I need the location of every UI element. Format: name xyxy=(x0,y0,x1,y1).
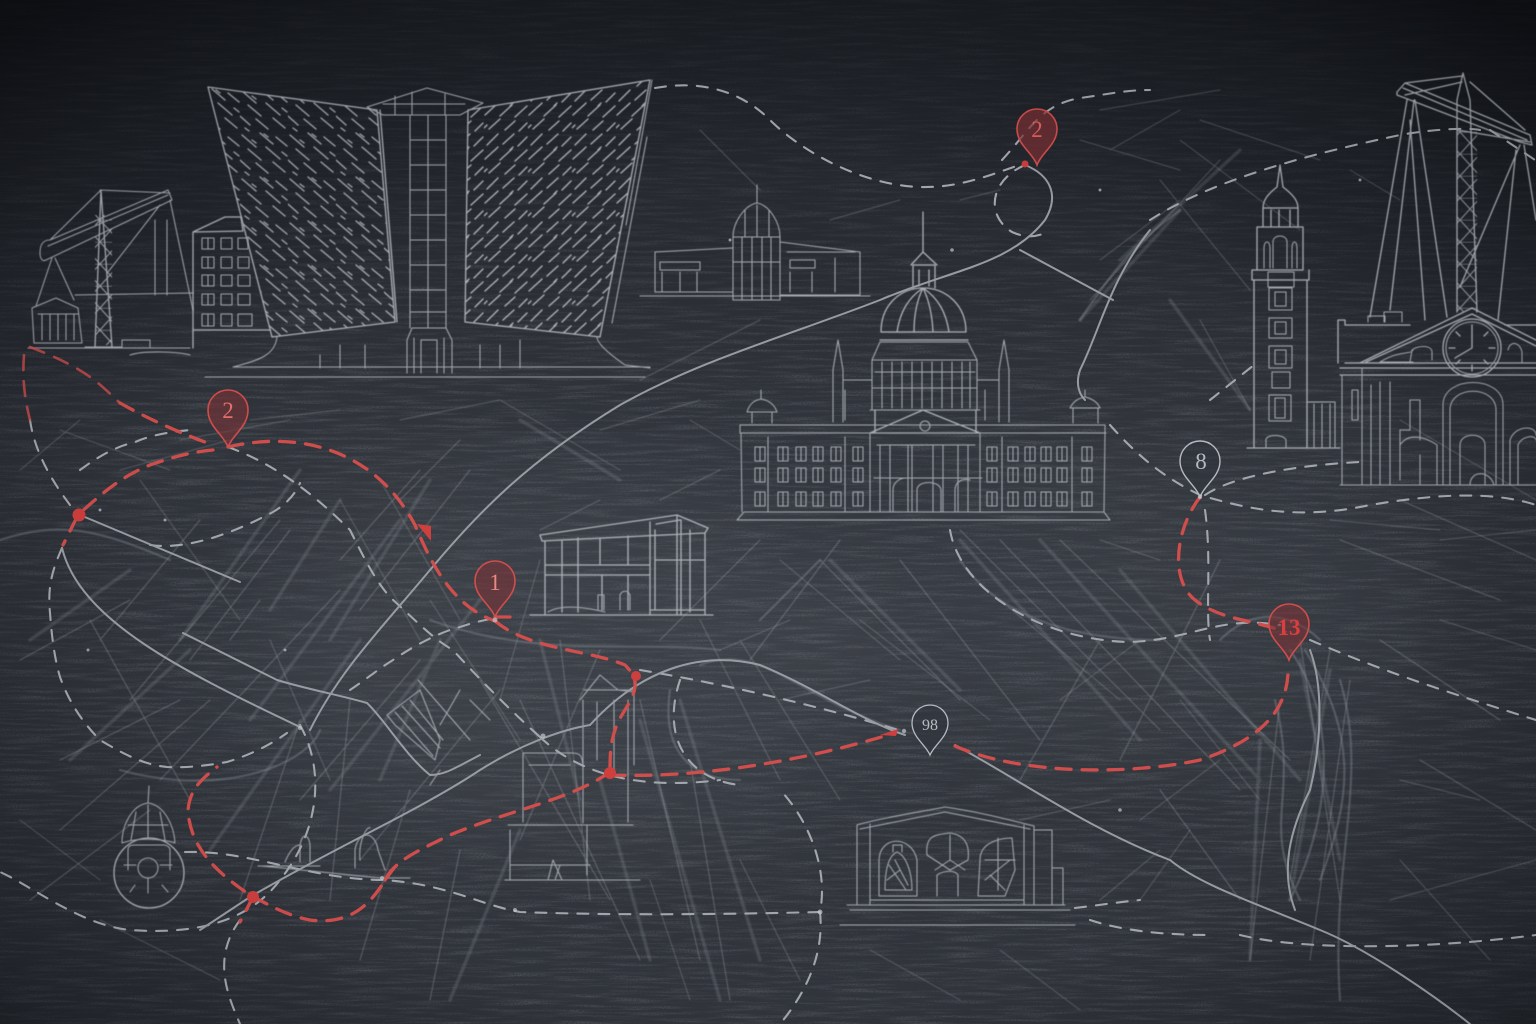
capitol windows xyxy=(755,447,1092,506)
small domed hall xyxy=(640,185,870,300)
tower crane with hanging building xyxy=(28,190,193,355)
capitol spires xyxy=(833,340,1009,422)
right tower crane xyxy=(1368,73,1536,322)
pin: 8 xyxy=(1180,441,1220,497)
small dome emblem xyxy=(114,786,184,908)
left hull wing xyxy=(208,87,397,337)
central tower and lower building xyxy=(505,675,640,880)
clock pediment xyxy=(1338,308,1536,375)
right tower with dome xyxy=(1247,165,1340,448)
Titanic-style angular building xyxy=(205,80,652,377)
central tower xyxy=(367,88,483,377)
pin: left 2 xyxy=(208,390,248,447)
red dashed route xyxy=(23,347,1288,922)
brick apartment building xyxy=(193,217,270,348)
capitol entrance arches xyxy=(893,478,970,512)
small chapel sketches xyxy=(258,828,410,878)
tilted small building xyxy=(387,680,490,785)
clock face xyxy=(1443,319,1501,377)
bottom shrine building xyxy=(840,807,1075,925)
pin: 98: 98 xyxy=(922,717,938,734)
capitol dome xyxy=(870,212,980,410)
main capitol building xyxy=(737,212,1110,520)
clock tower building xyxy=(1338,308,1536,485)
pin: top 2 xyxy=(1017,109,1057,165)
capitol pediment xyxy=(870,410,980,433)
pin: 13 xyxy=(1269,604,1309,660)
right hull wing xyxy=(465,80,652,337)
gray solid routes xyxy=(62,165,1470,1024)
red route nodes xyxy=(72,160,1028,903)
pin: 1: 1 xyxy=(489,570,501,595)
pin: top 2: 2 xyxy=(1031,117,1043,142)
capitol facade xyxy=(737,425,1110,520)
pin: 1 xyxy=(475,561,515,617)
hull ground line xyxy=(205,337,650,377)
corner cupolas xyxy=(747,390,1100,423)
small chalk marks xyxy=(86,178,1362,914)
mid warehouse xyxy=(530,515,713,615)
clock building facade xyxy=(1340,343,1536,485)
pin: 8: 8 xyxy=(1195,449,1207,474)
pin: 13: 13 xyxy=(1278,615,1300,640)
pin: 98 xyxy=(912,705,948,755)
pin: left 2: 2 xyxy=(222,398,234,423)
